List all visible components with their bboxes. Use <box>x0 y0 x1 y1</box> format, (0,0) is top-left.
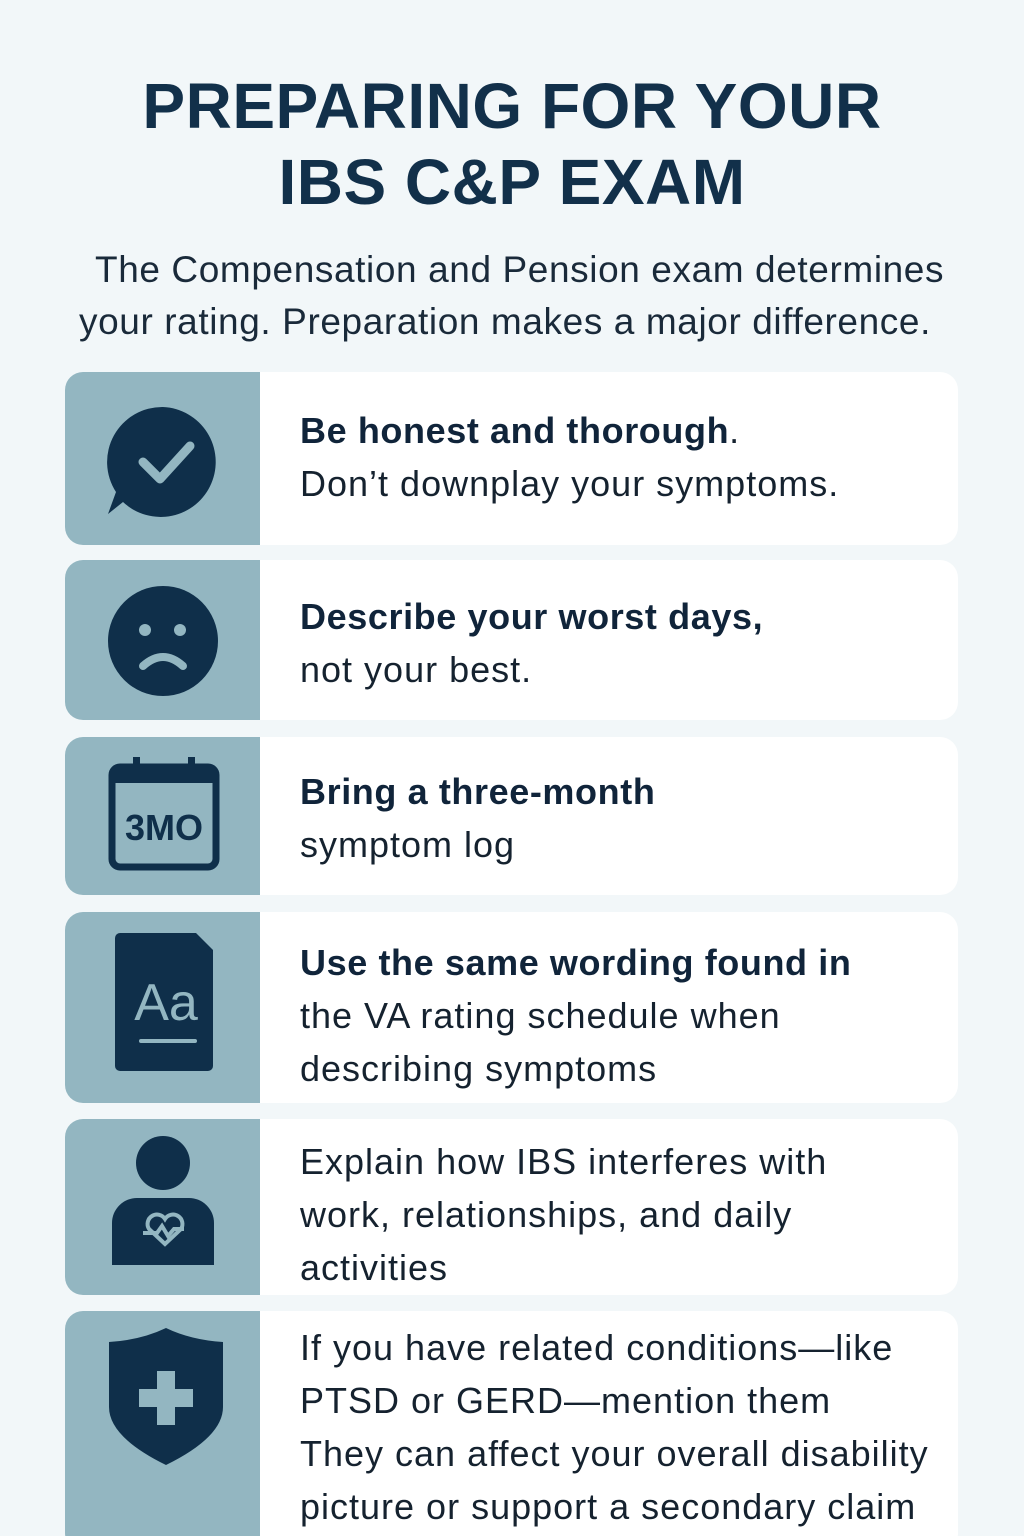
text 1 <box>300 410 839 504</box>
card 3: log <box>65 737 958 895</box>
text 6: They can affect your overall disability <box>300 1433 929 1474</box>
icon: calendar 3MO: 3MO <box>125 807 203 848</box>
icon: speech check <box>107 407 216 517</box>
text 2 <box>300 596 763 690</box>
card 5: impact <box>65 1119 958 1295</box>
text 6: If you have related conditions—like <box>300 1327 893 1368</box>
icon: document Aa <box>115 933 213 1071</box>
title: IBS C&P EXAM <box>278 146 746 218</box>
icon: sad face <box>108 586 218 696</box>
icon: person heart <box>112 1136 214 1265</box>
text 1: Don’t downplay your symptoms. <box>300 463 839 504</box>
text: your rating. Preparation makes a major difference. <box>79 301 931 342</box>
text 3 <box>300 771 655 865</box>
subtitle: The Compensation and Pension exam determines <box>95 249 944 290</box>
text 5 <box>300 1141 827 1288</box>
text 3: Bring a three-month <box>300 771 655 812</box>
text 6: picture or support a secondary claim <box>300 1486 916 1527</box>
text 6: PTSD or GERD—mention them <box>300 1380 831 1421</box>
text 5: activities <box>300 1247 448 1288</box>
text 3: symptom log <box>300 824 515 865</box>
text 2: not your best. <box>300 649 532 690</box>
card 4: wording <box>65 912 958 1103</box>
icon: shield cross <box>109 1328 223 1465</box>
title <box>142 70 882 218</box>
text 5: Explain how IBS interferes with <box>300 1141 827 1182</box>
text 4 <box>300 942 851 1089</box>
icon: document Aa: Aa <box>134 974 198 1032</box>
card 1: honest <box>65 372 958 545</box>
text 4: the VA rating schedule when <box>300 995 781 1036</box>
card 6: related conditions <box>65 1311 958 1536</box>
title: PREPARING FOR YOUR <box>142 70 882 142</box>
icon: calendar 3MO <box>108 757 220 870</box>
text 1: Be honest and thorough. <box>300 410 740 451</box>
text 2: Describe your worst days, <box>300 596 763 637</box>
text 6 <box>300 1327 929 1527</box>
text 5: work, relationships, and daily <box>300 1194 792 1235</box>
text 4: Use the same wording found in <box>300 942 851 983</box>
text 4: describing symptoms <box>300 1048 657 1089</box>
card 2: worst days <box>65 560 958 720</box>
